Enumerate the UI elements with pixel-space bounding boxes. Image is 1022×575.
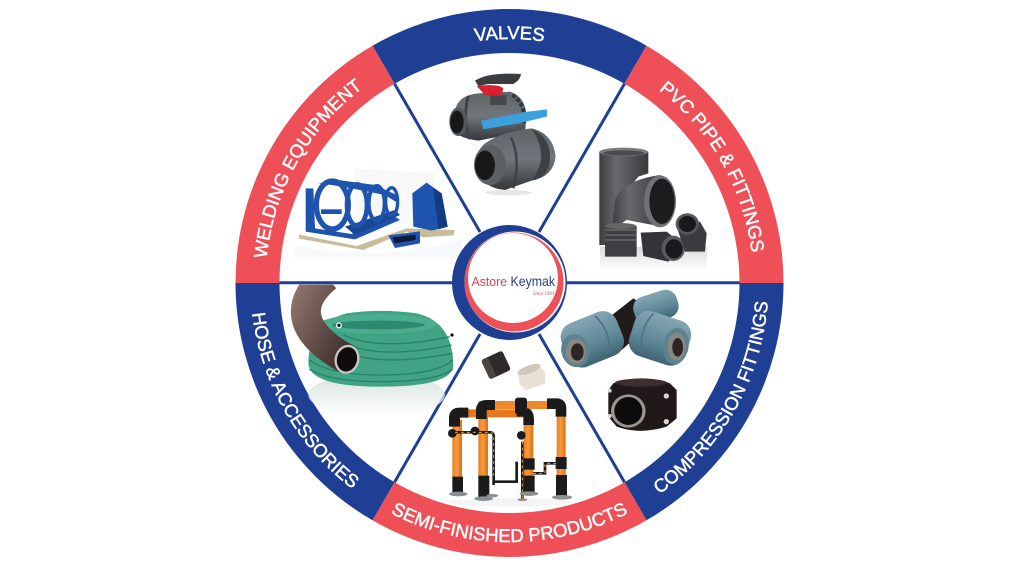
product image: compression fittings (556, 287, 695, 431)
product image: hose coil (306, 277, 455, 417)
product image: ball valve (449, 74, 556, 195)
segment: welding equipment: WELDING EQUIPMENT (254, 78, 360, 258)
product image: semi-finished pipework (447, 350, 573, 506)
logo wordmark: Keymak (510, 273, 556, 289)
segment: pvc pipe and fittings (624, 46, 784, 283)
segment: hose and accessories (236, 283, 394, 520)
segment: hose and accessories: HOSE & ACCESSORIES (252, 312, 358, 488)
central logo (452, 225, 567, 340)
segment: welding equipment (236, 46, 394, 283)
segment: pvc pipe and fittings: PVC PIPE & FITTINGS (660, 80, 764, 252)
segment: valves: VALVES (473, 26, 544, 42)
product wheel infographic (236, 9, 784, 557)
segment: valves (372, 9, 646, 84)
logo wordmark: Since 1993 (533, 291, 554, 297)
product image: pvc pipe fittings (599, 148, 707, 272)
spokes (280, 84, 740, 482)
segment: semi-finished products: SEMI-FINISHED PRODUCTS (392, 503, 627, 542)
segment: semi-finished products (372, 482, 646, 557)
logo wordmark: Astore (472, 274, 507, 289)
segment: compression fittings: COMPRESSION FITTINGS (654, 302, 768, 492)
logo wordmark (472, 273, 556, 297)
segment: compression fittings (624, 283, 784, 520)
product image: welding machine (295, 168, 462, 258)
